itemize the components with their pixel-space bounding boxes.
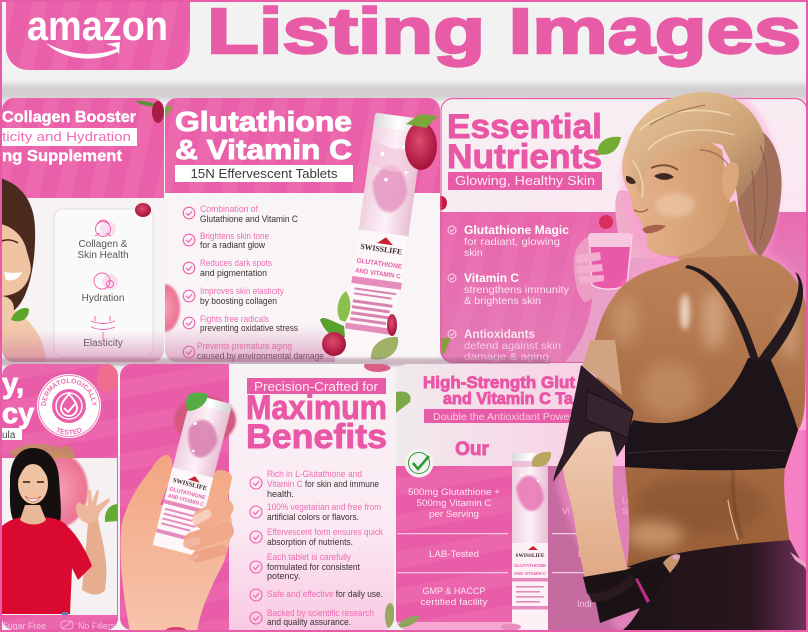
subtitle bar: Double the Antioxidant Power <box>433 411 574 423</box>
leaf <box>598 137 621 155</box>
benefit list <box>183 204 324 361</box>
check icons <box>250 477 262 624</box>
formula tag: ula <box>2 430 16 441</box>
amazon wordmark: amazon <box>27 2 168 49</box>
product bottle center <box>512 453 548 630</box>
title: and Vitamin C Ta <box>443 389 574 408</box>
right pink margin <box>760 430 806 632</box>
hair <box>625 92 765 200</box>
other column: Indi <box>577 599 592 609</box>
benefit text: and pigmentation <box>200 268 267 278</box>
heading: Maximum <box>246 389 387 427</box>
top right berry <box>97 363 119 393</box>
ponytail <box>737 128 782 257</box>
heading fragment: cy <box>2 398 34 430</box>
fingernails <box>196 514 207 520</box>
column heading: Our <box>455 439 489 460</box>
benefit text: Each tablet is carefully <box>267 552 351 562</box>
benefit text: preventing oxidative stress <box>200 323 298 333</box>
small leaf <box>440 338 451 357</box>
shorts <box>623 540 806 630</box>
benefit text: for a radiant glow <box>200 240 265 250</box>
smiling woman <box>0 178 46 362</box>
panel 3 outline <box>441 98 807 362</box>
glove <box>583 554 680 623</box>
amazon badge <box>6 2 190 70</box>
footer labels: No Fillers <box>78 621 116 631</box>
raspberry and leaves bottom <box>320 291 398 360</box>
arc text: TESTED <box>57 427 82 435</box>
benefit text: Reduces dark spots <box>200 258 272 268</box>
our column: 500mg Vitamin C <box>416 498 492 508</box>
tablets bar: 15N Effervescent Tablets <box>190 167 338 181</box>
back shading and highlights <box>611 290 799 549</box>
thumb tip <box>663 554 680 573</box>
woman in red shirt <box>2 448 110 615</box>
our column: 500mg Glutathione + <box>408 487 500 497</box>
item: glutathione magic <box>464 225 570 259</box>
footer labels: Sugar Free <box>2 621 46 631</box>
pink header band <box>165 98 440 193</box>
brow <box>651 165 678 170</box>
raspberry left <box>165 282 182 334</box>
other column <box>552 495 632 609</box>
icon: no fillers <box>61 621 73 629</box>
strawberry top <box>405 114 438 170</box>
title: High-Strength Glut <box>423 373 575 392</box>
pink left column <box>396 466 548 632</box>
benefit text: formulated for consistent <box>267 562 360 572</box>
hip hand <box>790 552 806 568</box>
upper arm under band <box>582 340 622 395</box>
our column: certified facility <box>420 597 488 607</box>
left panel berry <box>440 196 447 210</box>
item: glutathione magic: for radiant, glowing <box>464 236 560 248</box>
panel row shadow <box>0 358 550 366</box>
other column: S <box>622 506 628 516</box>
benefit text: 100% vegetarian and free from <box>267 502 381 512</box>
benefit text: artificial colors or flavors. <box>267 512 359 522</box>
sports bra <box>625 265 803 470</box>
right grey pink column <box>548 466 798 632</box>
check badge <box>404 448 434 478</box>
bottom fade <box>2 334 164 362</box>
pink lower band <box>440 212 808 362</box>
heading: & Vitamin C <box>175 134 352 165</box>
benefit text: Effervescent form ensures quick <box>267 527 383 537</box>
benefit text <box>267 469 383 627</box>
other column: Vi <box>562 506 570 516</box>
icon: elasticity arrows <box>91 316 115 340</box>
benefit text: Fights free radicals <box>200 314 269 324</box>
panel: collagen booster <box>0 98 164 362</box>
product bottle: GLUTATHIONE <box>356 257 403 271</box>
benefit text: potency. <box>267 571 300 581</box>
benefit text <box>197 204 324 361</box>
armband <box>553 365 633 482</box>
nutrient list <box>448 225 570 363</box>
other column: L <box>578 549 583 559</box>
torso <box>590 255 806 567</box>
icon: hydration face <box>94 273 118 290</box>
icon: collagen face <box>95 220 116 237</box>
hand palm <box>120 455 233 632</box>
bottom fade <box>165 329 335 362</box>
raspberry behind <box>10 444 88 528</box>
head and face <box>622 120 730 256</box>
lips <box>642 225 666 233</box>
item: antioxidants <box>464 329 561 363</box>
subheading bar: Precision-Crafted for <box>254 380 378 394</box>
benefit text: Rich in L-Glutathione and <box>267 469 362 479</box>
label: hydration: Hydration <box>82 293 124 304</box>
raspberry <box>135 203 151 217</box>
benefit text: by boosting collagen <box>200 296 277 306</box>
benefits card <box>54 209 153 357</box>
benefit text: Prevents premature aging <box>197 341 292 351</box>
benefit text: caused by environmental damage <box>197 351 324 361</box>
product bottle held: GLUTATHIONE <box>169 486 206 502</box>
woman athlete <box>553 92 806 630</box>
panel: maximum benefits <box>120 360 395 632</box>
item: vitamin c <box>464 273 570 307</box>
bottom berry <box>166 627 186 632</box>
benefit text: Improves skin elasticity <box>200 286 284 296</box>
white image area <box>2 458 117 615</box>
benefit text: health. <box>267 489 294 499</box>
fingers <box>187 508 225 558</box>
panel: dermatologically tested <box>2 364 118 630</box>
check icons <box>183 207 195 358</box>
heading: Essential <box>447 108 602 146</box>
product bottle held <box>153 394 232 555</box>
item: antioxidants: damage & aging <box>464 351 549 363</box>
item: vitamin c: strengthens immunity <box>464 284 570 296</box>
item: glutathione magic: skin <box>464 247 483 259</box>
our column: per Serving <box>429 509 479 519</box>
raspberry behind bottle <box>174 396 236 444</box>
white text area <box>229 364 394 632</box>
item: antioxidants: Antioxidants <box>464 329 535 341</box>
item: vitamin c: Vitamin C <box>464 273 519 285</box>
our column <box>397 487 508 607</box>
panel: high strength comparison <box>396 364 806 632</box>
heading line 3: ng Supplement <box>2 148 122 165</box>
arc text: DERMATOLOGICALLY <box>41 378 97 406</box>
hair strands <box>632 110 735 198</box>
heading: Nutrients <box>447 138 602 176</box>
corner berries and leaf <box>364 360 395 629</box>
benefit text: absorption of nutrients. <box>267 537 353 547</box>
face highlights <box>655 193 695 217</box>
subheading bar: ticity and Hydration <box>2 130 131 144</box>
far eye <box>626 176 636 184</box>
product bottle center: SWISSLIFE <box>516 553 545 559</box>
eye <box>654 173 674 180</box>
woman drinking <box>565 190 688 362</box>
bottom pale strip <box>396 622 548 632</box>
subheading bar <box>448 172 602 190</box>
label: elasticity: Elasticity <box>83 338 123 349</box>
pink header band <box>0 98 164 198</box>
woman glow <box>556 95 806 630</box>
label: collagen and skin health: Skin Health <box>77 250 129 261</box>
neck <box>672 200 760 280</box>
check icons <box>448 226 456 338</box>
heading line 1: Collagen Booster <box>2 109 136 126</box>
pink accent <box>635 578 650 603</box>
benefit text: Glutathione and Vitamin C <box>200 214 298 224</box>
panel shadow band <box>0 84 808 100</box>
stripes <box>440 222 606 362</box>
top right leaf and berry <box>135 101 158 106</box>
ear <box>722 162 739 200</box>
panel: glutathione and vitamin c <box>148 98 440 362</box>
nail <box>672 554 680 560</box>
hair dark strands <box>650 105 768 245</box>
benefit text: Brightens skin tone <box>200 231 269 241</box>
icon: drop with check <box>61 394 77 416</box>
amazon smile arrow <box>46 42 120 59</box>
other column: Lo <box>622 495 632 505</box>
leaf <box>11 308 29 321</box>
heading: Benefits <box>246 418 387 456</box>
our column: GMP & HACCP <box>422 586 486 596</box>
benefit text: and quality assurance. <box>267 617 351 627</box>
panel: essential nutrients <box>435 98 808 363</box>
subheading bar: Glowing, Healthy Skin <box>455 174 595 188</box>
item: glutathione magic: Glutathione Magic <box>464 225 570 237</box>
leaves and tablets <box>396 392 551 630</box>
label: collagen and skin health: Collagen & <box>79 239 128 250</box>
benefit text: Backed by scientific research <box>267 608 374 618</box>
forearm <box>563 431 628 578</box>
benefit text: Safe and effective for daily use. <box>267 589 383 599</box>
footer labels <box>2 621 116 631</box>
leaf on bottle <box>186 393 208 411</box>
benefit list <box>250 469 383 627</box>
product bottle: AND VITAMIN C <box>355 267 401 281</box>
benefit text: Combination of <box>200 204 258 214</box>
our column: LAB-Tested <box>429 549 479 559</box>
subheading bar <box>0 128 137 146</box>
nose <box>634 209 648 212</box>
product bottle <box>344 112 418 337</box>
product bottle: SWISSLIFE <box>360 242 403 257</box>
tablets bar <box>175 165 353 182</box>
product bottle center: GLUTATHIONE <box>514 563 547 569</box>
product bottle held: AND VITAMIN C <box>167 493 204 508</box>
benefit text: Vitamin C for skin and immune <box>267 479 379 489</box>
raspberry <box>599 215 613 229</box>
item: vitamin c: & brightens skin <box>464 295 541 307</box>
heading fragment: y, <box>2 368 24 400</box>
product bottle center: AND VITAMIN C <box>514 571 546 577</box>
leaf <box>105 504 117 522</box>
heading: Glutathione <box>175 106 352 137</box>
formula tag <box>0 428 22 441</box>
top left leaf <box>165 106 173 118</box>
badge: dermatologically tested <box>37 374 101 438</box>
product bottle held: SWISSLIFE <box>172 477 208 492</box>
item: antioxidants: defend against skin <box>464 340 561 352</box>
